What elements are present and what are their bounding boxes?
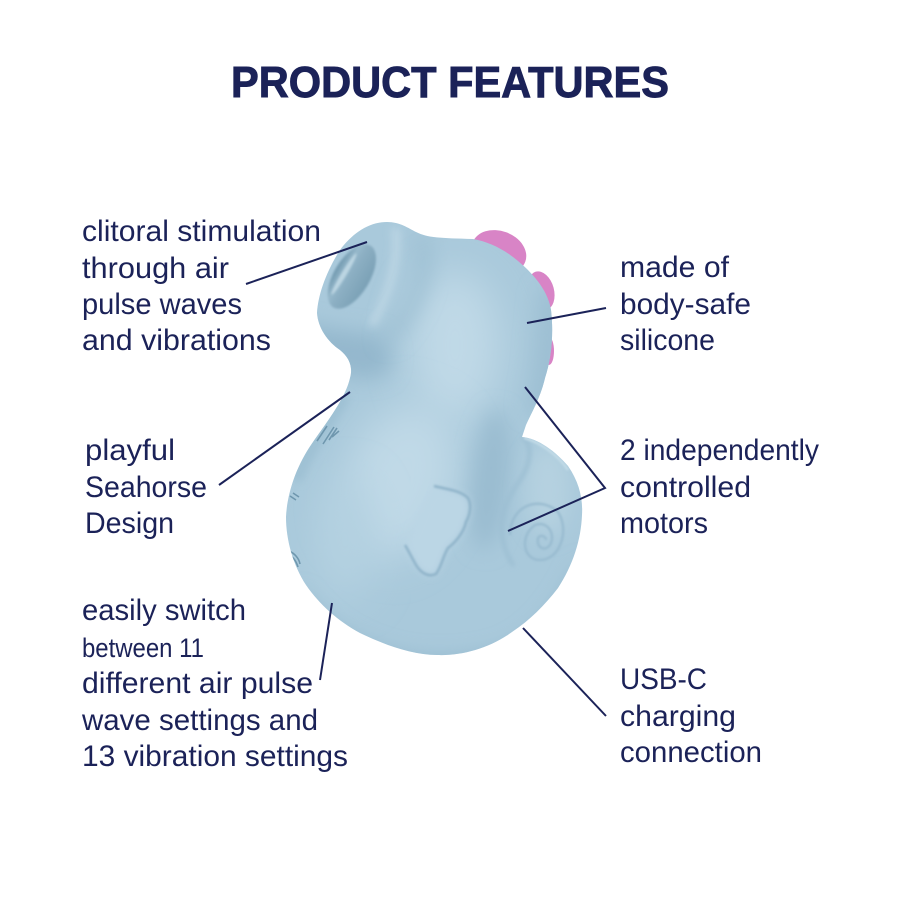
text: USB-C [620,663,762,769]
text: settings: wave settings and [81,704,318,737]
mouth opening [327,244,377,310]
text: silicone: body-safe [620,288,751,321]
text: seahorse design [85,434,207,540]
side fin [405,486,470,575]
product illustration: seahorse device [286,222,582,656]
text: settings: different air pulse [82,667,313,700]
text: air pulse waves [82,215,321,357]
button icons [290,426,340,568]
pink crest fins [466,223,559,365]
text: silicone: silicone [620,324,715,357]
text: USB-C: connection [620,736,762,769]
leader lines [219,242,606,716]
text: settings: between 11 [82,633,204,663]
line: USB-C [523,628,606,716]
title: PRODUCT FEATURES [231,58,669,107]
body silhouette [286,222,582,655]
text: air pulse waves: clitoral stimulation [82,215,321,248]
text: silicone: made of [620,251,730,284]
text: settings [81,594,348,773]
text: USB-C: charging [620,700,736,733]
text: air pulse waves: through air [82,252,229,285]
text: motors [620,434,819,540]
line: air pulse [246,242,367,284]
text: silicone [620,251,751,357]
text: motors: motors [620,507,708,540]
text: settings: easily switch [82,594,246,627]
tail edge [518,437,531,484]
text: USB-C: USB-C [620,663,707,696]
text: motors: controlled [620,471,751,504]
text: seahorse design: Design [85,507,174,540]
line: silicone [527,308,606,323]
text: motors: 2 independently [620,434,819,467]
text: air pulse waves: pulse waves [82,288,242,321]
tail spiral [510,504,563,560]
text: air pulse waves: and vibrations [82,324,271,357]
text: settings: 13 vibration settings [82,740,348,773]
line: settings [320,603,332,680]
lines: motors [508,387,605,531]
body shading [293,230,564,655]
text: seahorse design: playful [85,434,175,467]
line: seahorse design [219,392,350,485]
text: seahorse design: Seahorse [85,471,207,504]
